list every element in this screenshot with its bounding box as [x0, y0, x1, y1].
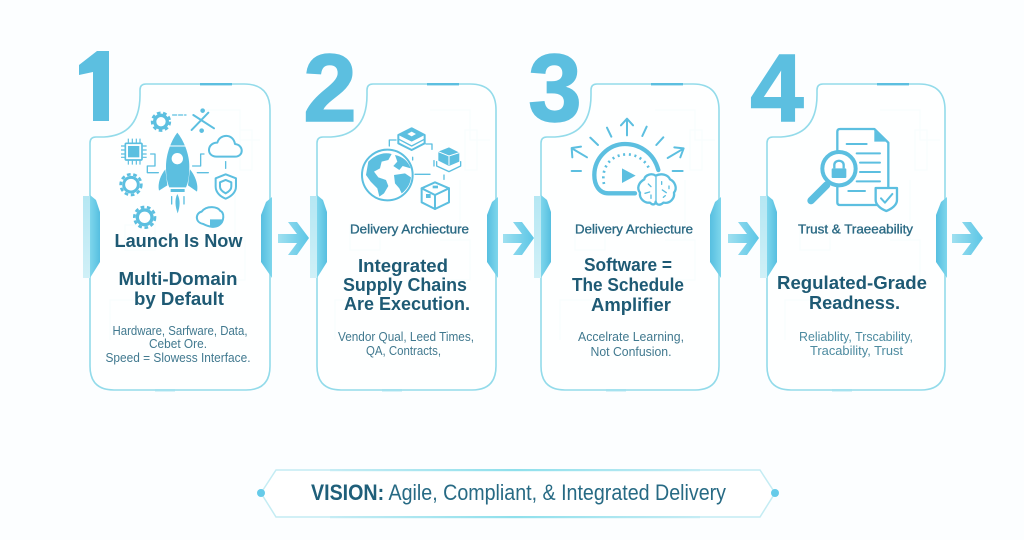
- icon: cloud: [209, 136, 242, 157]
- icon: rocket with domain icons: [121, 109, 242, 228]
- heading: [572, 254, 684, 315]
- panel: card 4 frame: [760, 83, 947, 391]
- icon: shield: [216, 162, 236, 199]
- body: [106, 323, 250, 365]
- arrow 2: [503, 222, 534, 255]
- icon: circuit connectors: [147, 154, 208, 173]
- heading: [777, 272, 927, 313]
- icon: globe: [362, 150, 413, 200]
- heading: Regulated-Grade: [777, 272, 927, 293]
- icon: bottom box: [422, 182, 449, 209]
- icon: gear left: [121, 174, 141, 195]
- heading: Integrated: [358, 255, 448, 276]
- number 1: [79, 51, 109, 121]
- icon: gear bottom: [134, 207, 155, 228]
- heading: [118, 268, 238, 309]
- icon: top gear: [152, 113, 170, 131]
- heading: Amplifier: [591, 294, 671, 315]
- body: QA, Contracts,: [366, 343, 441, 358]
- subtitle: Trust & Traeeability: [798, 222, 914, 236]
- arrow 3: [728, 222, 759, 255]
- icon: up arrow: [621, 119, 633, 135]
- text: card 1: [106, 230, 250, 365]
- panel: card 2 frame: [310, 83, 498, 391]
- body: Reliablity, Trscability,: [799, 329, 913, 344]
- icon: brain: [638, 174, 676, 205]
- icon: crossed tools: [173, 109, 214, 132]
- arrow 4: [952, 222, 983, 255]
- icon: ticks: [572, 127, 683, 171]
- body: [578, 329, 684, 359]
- number 2: 2: [303, 35, 357, 142]
- background circuit pattern: [110, 110, 940, 340]
- heading: Software =: [584, 254, 672, 275]
- body: Speed = Slowess Interface.: [106, 350, 250, 365]
- subtitle: Delivery Archiecture: [575, 222, 693, 236]
- heading: Supply Chains: [343, 274, 467, 295]
- number 4: 4: [750, 35, 804, 142]
- body: Hardware, Sarfware, Data,: [112, 323, 248, 338]
- heading: Multi-Domain: [118, 268, 238, 289]
- subtitle: Launch Is Now: [114, 230, 243, 251]
- heading: by Default: [134, 288, 224, 309]
- heading: [343, 255, 470, 314]
- heading: The Schedule: [572, 274, 684, 295]
- panel: card 1 frame: [83, 83, 272, 391]
- body: Cebet Ore.: [149, 336, 207, 351]
- vision banner: [257, 469, 779, 518]
- arrow 1: [278, 222, 309, 255]
- body: Tracability, Trust: [810, 343, 903, 358]
- icon: gauge: [594, 144, 658, 193]
- subtitle: Delivery Archiecture: [350, 222, 469, 236]
- body: Not Confusion.: [590, 344, 672, 359]
- icon: speedometer and brain: [572, 119, 684, 205]
- banner text: VISION: Agile, Compliant, & Integrated Delivery: [311, 480, 726, 505]
- panel: card 3 frame: [534, 83, 721, 391]
- icon: shield check: [876, 188, 897, 211]
- text: card 2: [338, 222, 474, 358]
- body: Accelrate Learning,: [578, 329, 684, 344]
- icon: chip: [121, 139, 147, 165]
- heading: Are Execution.: [344, 293, 470, 314]
- icon: right arrow: [668, 147, 684, 158]
- icon: top box: [398, 128, 425, 150]
- body: [338, 329, 474, 358]
- number 3: 3: [528, 35, 582, 142]
- icon: magnifier and lock: [811, 152, 856, 201]
- icon: right box: [437, 147, 461, 172]
- icon: document with magnifier: [811, 129, 897, 211]
- body: [799, 329, 913, 358]
- icon: data cloud: [197, 207, 223, 227]
- icon: globe and boxes: [362, 128, 461, 209]
- icon: rocket: [159, 133, 197, 213]
- icon: connectors: [389, 140, 444, 179]
- icon: document: [837, 129, 888, 205]
- icon: left arrow: [572, 147, 587, 157]
- heading: Readness.: [809, 292, 900, 313]
- body: Vendor Qual, Leed Times,: [338, 329, 474, 344]
- text: card 4: [777, 222, 927, 358]
- text: card 3: [572, 222, 693, 359]
- number 1: 1: [69, 34, 123, 141]
